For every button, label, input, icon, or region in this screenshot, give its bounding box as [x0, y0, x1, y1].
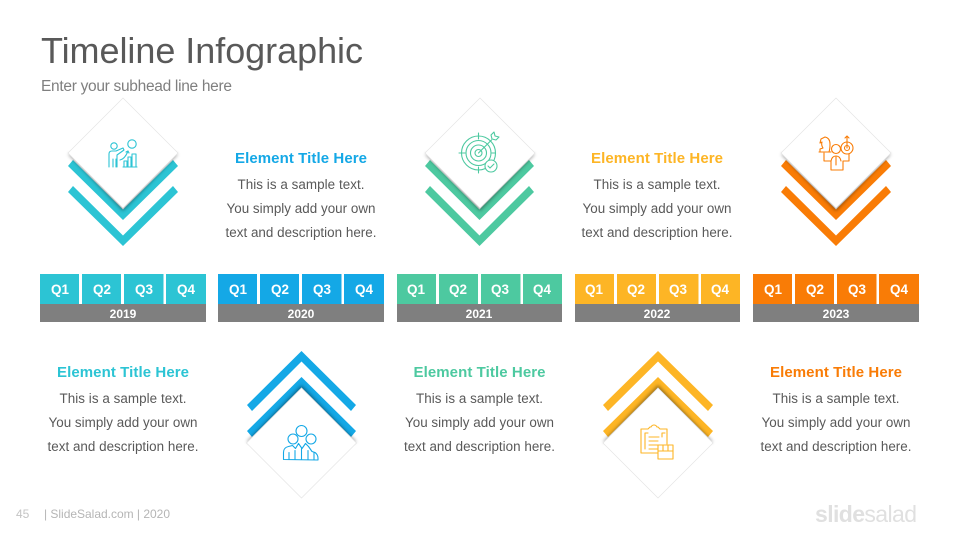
- icon: target with arrow: [459, 132, 499, 173]
- chevrons: 2022: [603, 351, 713, 437]
- quarter labels: 2023: [764, 282, 908, 297]
- text block: 2020: [226, 177, 376, 240]
- heading: 2021: Element Title Here: [414, 364, 546, 381]
- text block: 2022: [582, 177, 732, 240]
- text block: 2022: text and description here.: [582, 225, 732, 240]
- quarter labels: 2022: [585, 282, 729, 297]
- heading: 2019: Element Title Here: [57, 364, 189, 381]
- chevrons: 2023: [781, 160, 891, 246]
- panel: 2019 quarter bar: [40, 274, 206, 322]
- panel: 2019 diamond: [68, 98, 178, 246]
- text block: 2023: You simply add your own: [762, 415, 910, 430]
- text block: 2020: text and description here.: [226, 225, 376, 240]
- logo: slidesalad: [815, 501, 917, 527]
- text block: 2021: [404, 391, 555, 454]
- chevrons: 2021: [425, 160, 534, 246]
- heading: 2023: Element Title Here: [770, 364, 902, 381]
- icon: presenter with chart: [109, 140, 137, 167]
- quarter labels: 2022: Q3: [669, 282, 687, 297]
- quarter labels: 2020: Q2: [271, 282, 289, 297]
- diamond card: 2020: [246, 385, 356, 498]
- text block: 2019: This is a sample text.: [60, 391, 186, 406]
- quarter labels: 2021: Q4: [533, 282, 551, 297]
- quarters: 2019: [40, 274, 206, 304]
- panel: 2023 diamond: [781, 98, 891, 246]
- quarter labels: 2020: Q4: [355, 282, 373, 297]
- quarter labels: 2019: [51, 282, 195, 297]
- heading: 2022: Element Title Here: [591, 150, 723, 167]
- panel: 2019 description: [48, 364, 198, 454]
- quarter labels: 2021: Q2: [449, 282, 467, 297]
- panel: 2023 description: [760, 364, 912, 454]
- text block: 2020: You simply add your own: [226, 201, 376, 216]
- diamond card: 2019: [68, 98, 178, 211]
- chevrons: 2019: [68, 160, 178, 246]
- year bar: 2020: [218, 304, 384, 322]
- text block: 2022: You simply add your own: [582, 201, 732, 216]
- quarter labels: 2019: Q2: [93, 282, 111, 297]
- text block: 2019: text and description here.: [48, 439, 198, 454]
- panel: 2020 quarter bar: [218, 274, 384, 322]
- quarter labels: 2022: Q4: [711, 282, 729, 297]
- quarter labels: 2020: Q3: [313, 282, 331, 297]
- year label: 2023: 2023: [823, 307, 850, 321]
- page number: 45: [16, 507, 30, 521]
- text block: 2021: You simply add your own: [405, 415, 554, 430]
- quarter labels: 2022: Q1: [585, 282, 603, 297]
- panel: 2021 description: [404, 364, 555, 454]
- year bar: 2023: [753, 304, 919, 322]
- year label: 2021: 2021: [466, 307, 493, 321]
- text block: 2023: [760, 391, 912, 454]
- text block: 2022: This is a sample text.: [594, 177, 720, 192]
- year bar: 2022: [575, 304, 740, 322]
- text block: 2019: You simply add your own: [48, 415, 198, 430]
- quarter labels: 2021: [407, 282, 551, 297]
- chevrons: 2020: [247, 351, 356, 437]
- text block: 2023: This is a sample text.: [772, 391, 900, 406]
- text block: 2019: [48, 391, 198, 454]
- quarters: 2020: [218, 274, 384, 304]
- quarter labels: 2023: Q1: [764, 282, 782, 297]
- subhead: Enter your subhead line here: [41, 78, 232, 95]
- quarter labels: 2022: Q2: [627, 282, 645, 297]
- icon: team of three people: [284, 426, 318, 460]
- text block: 2021: text and description here.: [404, 439, 555, 454]
- footer text: | SlideSalad.com | 2020: [44, 507, 170, 521]
- panel: 2022 diamond: [603, 351, 713, 498]
- text block: 2020: This is a sample text.: [238, 177, 364, 192]
- quarter labels: 2021: Q1: [407, 282, 425, 297]
- panel: 2022 description: [582, 150, 732, 240]
- year bar: 2019: [40, 304, 206, 322]
- diamond card: 2022: [603, 385, 713, 498]
- text block: 2023: text and description here.: [760, 439, 912, 454]
- panel: 2021 quarter bar: [397, 274, 562, 322]
- icon: clipboard with parcel: [641, 425, 673, 459]
- panel: 2020 description: [226, 150, 376, 240]
- quarter labels: 2023: Q2: [806, 282, 824, 297]
- quarters: 2021: [397, 274, 562, 304]
- year label: 2019: 2019: [110, 307, 137, 321]
- quarters: 2023: [753, 274, 919, 304]
- year label: 2022: 2022: [644, 307, 671, 321]
- quarter labels: 2021: Q3: [491, 282, 509, 297]
- quarter labels: 2023: Q3: [848, 282, 866, 297]
- quarter labels: 2019: Q1: [51, 282, 69, 297]
- panel: 2021 diamond: [425, 98, 535, 246]
- year bar: 2021: [397, 304, 562, 322]
- title: Timeline Infographic: [41, 30, 363, 71]
- quarter labels: 2020: [229, 282, 373, 297]
- diamond card: 2021: [425, 98, 535, 211]
- heading: 2020: Element Title Here: [235, 150, 367, 167]
- panel: 2023 quarter bar: [753, 274, 919, 322]
- quarter labels: 2023: Q4: [890, 282, 908, 297]
- panel: 2020 diamond: [246, 351, 356, 498]
- diamond card: 2023: [781, 98, 891, 211]
- quarter labels: 2020: Q1: [229, 282, 247, 297]
- text block: 2021: This is a sample text.: [416, 391, 543, 406]
- quarter labels: 2019: Q3: [135, 282, 153, 297]
- icon: strategist with chess knight and target: [819, 136, 853, 170]
- quarters: 2022: [575, 274, 740, 304]
- panel: 2022 quarter bar: [575, 274, 740, 322]
- year label: 2020: 2020: [288, 307, 315, 321]
- quarter labels: 2019: Q4: [177, 282, 195, 297]
